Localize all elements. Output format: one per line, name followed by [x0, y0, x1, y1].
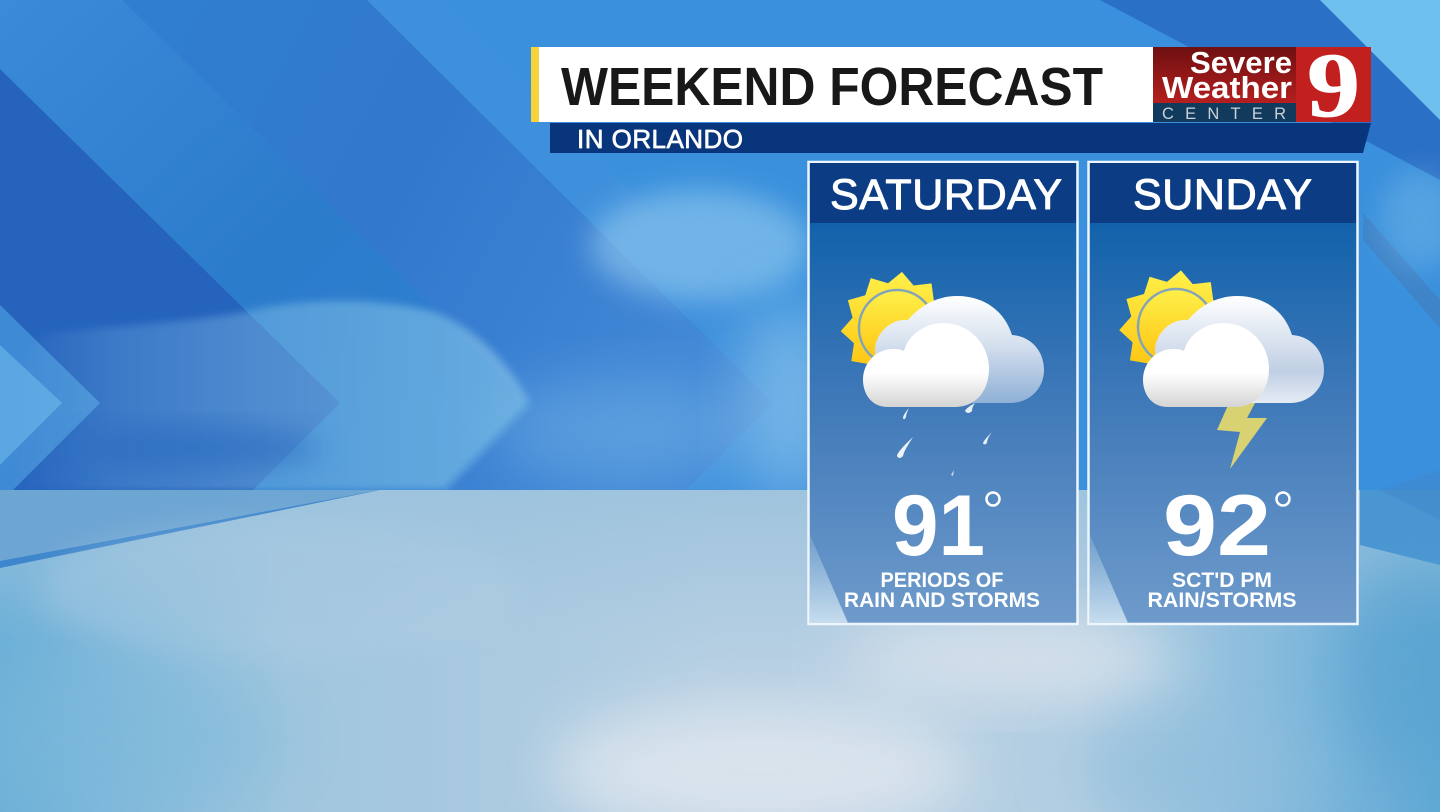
logo: Severe Weather Center 9: 9: [1307, 34, 1360, 136]
temperature: 91: [892, 478, 985, 574]
logo: Severe Weather Center 9: [1153, 34, 1371, 136]
header band: [1090, 163, 1356, 223]
floor: [0, 490, 1440, 812]
panel: Saturday: RAIN AND STORMS: [844, 589, 1040, 612]
title: WEEKEND FORECAST: [561, 57, 1103, 117]
degree sign: [1276, 492, 1290, 506]
heading: SUNDAY: [1133, 171, 1312, 219]
white title bar: [539, 47, 1153, 122]
chevron bands: [122, 0, 773, 490]
title banner: [531, 47, 1371, 154]
floor clouds: [40, 520, 520, 660]
panel body: [1088, 162, 1358, 624]
yellow accent: [531, 47, 539, 122]
condition text: SCT'D PM: [1172, 569, 1272, 592]
header band: [810, 163, 1076, 223]
corner wedge: [1090, 535, 1128, 623]
temperature: 92: [1163, 478, 1271, 574]
panel body: [808, 162, 1078, 624]
degree sign: [986, 492, 1000, 506]
logo: Severe Weather Center 9: CENTER: [1162, 105, 1286, 123]
logo: Severe Weather Center 9: Weather: [1162, 70, 1292, 105]
panel: Saturday: [808, 162, 1078, 624]
heading: SATURDAY: [830, 171, 1062, 219]
logo: Severe Weather Center 9: Severe: [1190, 45, 1292, 80]
icon: sun behind clouds with rain: [837, 267, 1044, 476]
icon: sun behind clouds with lightning: [1115, 265, 1324, 469]
panel: Sunday: [1088, 162, 1358, 624]
corner wedge: [810, 535, 848, 623]
right-side chevrons: [1100, 0, 1440, 180]
condition text: PERIODS OF: [880, 569, 1004, 592]
panel: Sunday: RAIN/STORMS: [1148, 589, 1296, 612]
subtitle: IN ORLANDO: [577, 124, 743, 154]
sky clouds: [10, 301, 530, 490]
navy subtitle bar: [550, 123, 1371, 153]
